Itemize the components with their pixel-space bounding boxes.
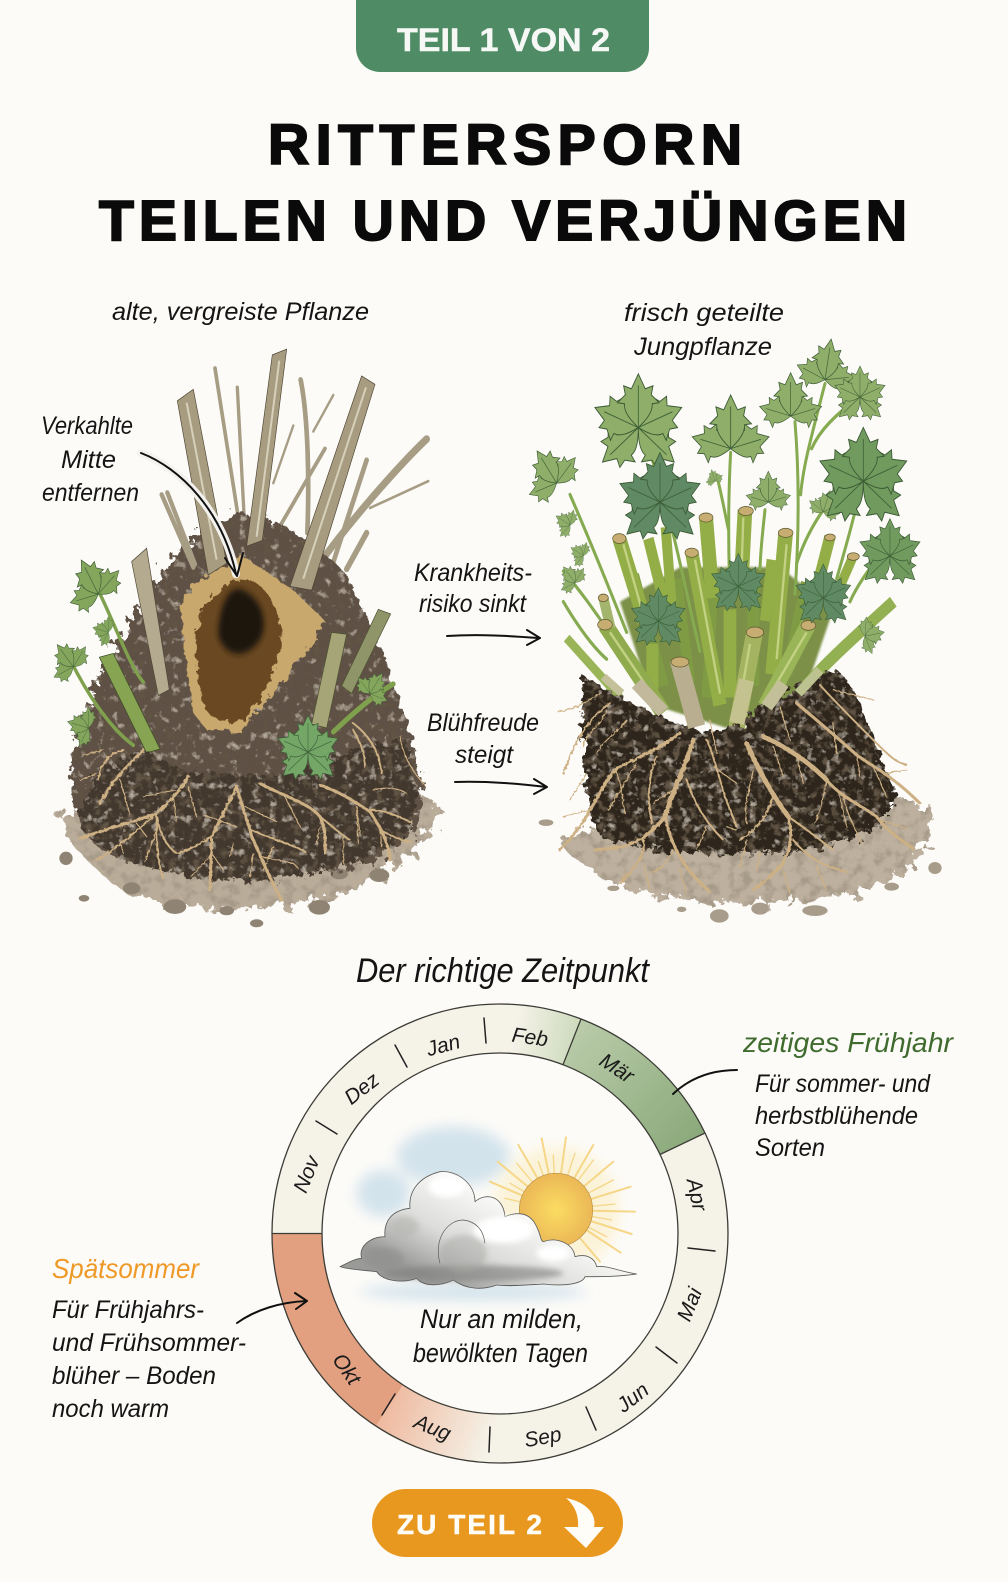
- ring base: [272, 1004, 728, 1463]
- icon: curved arrow down: [564, 1498, 604, 1548]
- label: remove bare centre: Mitte: [61, 446, 116, 474]
- label: more blooms: [427, 709, 539, 769]
- label: remove bare centre: Verkahlte: [41, 412, 133, 440]
- badge: part 1 of 2: [356, 0, 649, 72]
- label: remove bare centre: [41, 412, 139, 507]
- fade: February: [500, 1004, 581, 1065]
- month labels: [289, 1024, 711, 1452]
- label: disease risk falls: Krankheits-: [414, 559, 532, 587]
- thin dead sticks: [215, 368, 428, 569]
- month labels: Dez: [340, 1068, 384, 1109]
- sector: late summer: [272, 1234, 403, 1426]
- button: to part 2: ZU TEIL 2: [397, 1509, 542, 1540]
- month labels: Jan: [423, 1030, 463, 1061]
- leaf stalks: [563, 384, 880, 659]
- illustration: old overgrown plant: [39, 349, 437, 927]
- text: only on mild cloudy days: Nur an milden,: [420, 1304, 583, 1334]
- callout: late summer: Spätsommer: [52, 1253, 201, 1284]
- roots: [558, 685, 920, 893]
- green side shoots: [70, 594, 393, 745]
- month labels: Apr: [681, 1174, 711, 1214]
- label: young plant: [624, 299, 784, 361]
- label: old plant: alte, vergreiste Pflanze: [112, 298, 369, 326]
- thick cut stems: [177, 349, 375, 590]
- month labels: Nov: [289, 1152, 325, 1196]
- calendar ring: [272, 1004, 728, 1463]
- month labels: Sep: [522, 1423, 563, 1452]
- root ball: [558, 657, 920, 893]
- sector: early spring: [563, 1019, 705, 1154]
- deep dark core: [218, 589, 264, 654]
- front puff line: [438, 1220, 485, 1263]
- small leaves: [39, 542, 399, 752]
- arrow: late summer: [237, 1293, 307, 1323]
- arrow: disease risk: [447, 630, 540, 645]
- pale stem bases: [603, 660, 820, 727]
- title: RITTERSPORN: [268, 113, 742, 177]
- label: disease risk falls: risiko sinkt: [419, 590, 527, 618]
- callout: early spring: [742, 1027, 955, 1162]
- illustration: fresh young plant: [511, 332, 942, 923]
- right cut stumps: [312, 609, 391, 728]
- label: disease risk falls: [414, 559, 532, 618]
- label: young plant: frisch geteilte: [624, 299, 784, 327]
- text: only on mild cloudy days: [413, 1304, 588, 1368]
- sun glow: [493, 1147, 619, 1273]
- extra background stems: [633, 575, 807, 697]
- left thin stems: [162, 493, 195, 567]
- month labels: Feb: [510, 1024, 550, 1052]
- callout: early spring: Für sommer- und: [755, 1070, 931, 1098]
- bright cut top: [671, 657, 689, 667]
- ring outlines: [272, 1004, 728, 1463]
- callout: early spring: Sorten: [755, 1134, 825, 1162]
- hollow centre: [196, 579, 282, 722]
- palmate green leaf: [273, 715, 343, 788]
- backdrop behind stems: [620, 567, 833, 728]
- callout: late summer: blüher – Boden: [52, 1362, 216, 1390]
- back stems: [619, 510, 853, 705]
- callout: early spring: herbstblühende: [755, 1102, 918, 1130]
- label: more blooms: Blühfreude: [427, 709, 539, 737]
- cut stem tops: [598, 506, 859, 638]
- left dead stump: [132, 548, 169, 695]
- month labels: Mai: [673, 1283, 707, 1325]
- blue sky wash: [357, 1127, 587, 1300]
- callout: late summer: und Frühsommer-: [52, 1329, 246, 1357]
- badge: part 1 of 2: TEIL 1 VON 2: [397, 22, 610, 58]
- main roots: [80, 723, 425, 900]
- soil mound: [71, 514, 422, 871]
- stem highlights: [187, 361, 366, 579]
- green cut stump left: [99, 653, 160, 753]
- heading: right time: Der richtige Zeitpunkt: [356, 952, 650, 990]
- ground under young plant: [539, 800, 942, 923]
- month ticks: [316, 1018, 715, 1452]
- ground under old plant: [59, 787, 437, 927]
- month labels: Jun: [612, 1378, 653, 1418]
- month labels: Aug: [409, 1410, 454, 1446]
- callout: late summer: [52, 1253, 246, 1423]
- title: [99, 113, 907, 253]
- cloud body: [340, 1172, 637, 1288]
- illustration: sun behind clouds: [340, 1127, 637, 1300]
- light leaves: [511, 332, 889, 658]
- dark leaves: [613, 453, 856, 653]
- label: young plant: Jungpflanze: [633, 333, 772, 361]
- callout: late summer: Für Frühjahrs-: [52, 1296, 204, 1324]
- callout: early spring: zeitiges Frühjahr: [742, 1027, 955, 1058]
- month labels: Mär: [595, 1049, 639, 1089]
- dark root soil: [582, 670, 894, 855]
- arrow: blooms: [455, 779, 547, 794]
- button: to part 2: [372, 1489, 623, 1557]
- title: TEILEN UND VERJÜNGEN: [99, 189, 907, 253]
- text: only on mild cloudy days: bewölkten Tagen: [413, 1338, 588, 1368]
- stem highlights: [610, 518, 807, 720]
- mid leaves: [812, 427, 925, 592]
- sun rays: [490, 1137, 635, 1262]
- dark root soil: [80, 740, 415, 880]
- arrow: to bare centre: [141, 453, 243, 576]
- fade: August: [376, 1385, 500, 1463]
- front stems: [567, 598, 893, 728]
- sun disc: [519, 1173, 593, 1247]
- plant body: [39, 349, 428, 871]
- callout: late summer: noch warm: [52, 1395, 169, 1423]
- month labels: Okt: [328, 1349, 366, 1390]
- lower soil and roots: [80, 723, 425, 900]
- label: remove bare centre: entfernen: [42, 479, 139, 507]
- cloud shading: [363, 1176, 570, 1281]
- label: more blooms: steigt: [455, 741, 514, 769]
- hole rim: [180, 556, 325, 732]
- plant body: [511, 332, 925, 728]
- connector: early spring: [673, 1070, 737, 1094]
